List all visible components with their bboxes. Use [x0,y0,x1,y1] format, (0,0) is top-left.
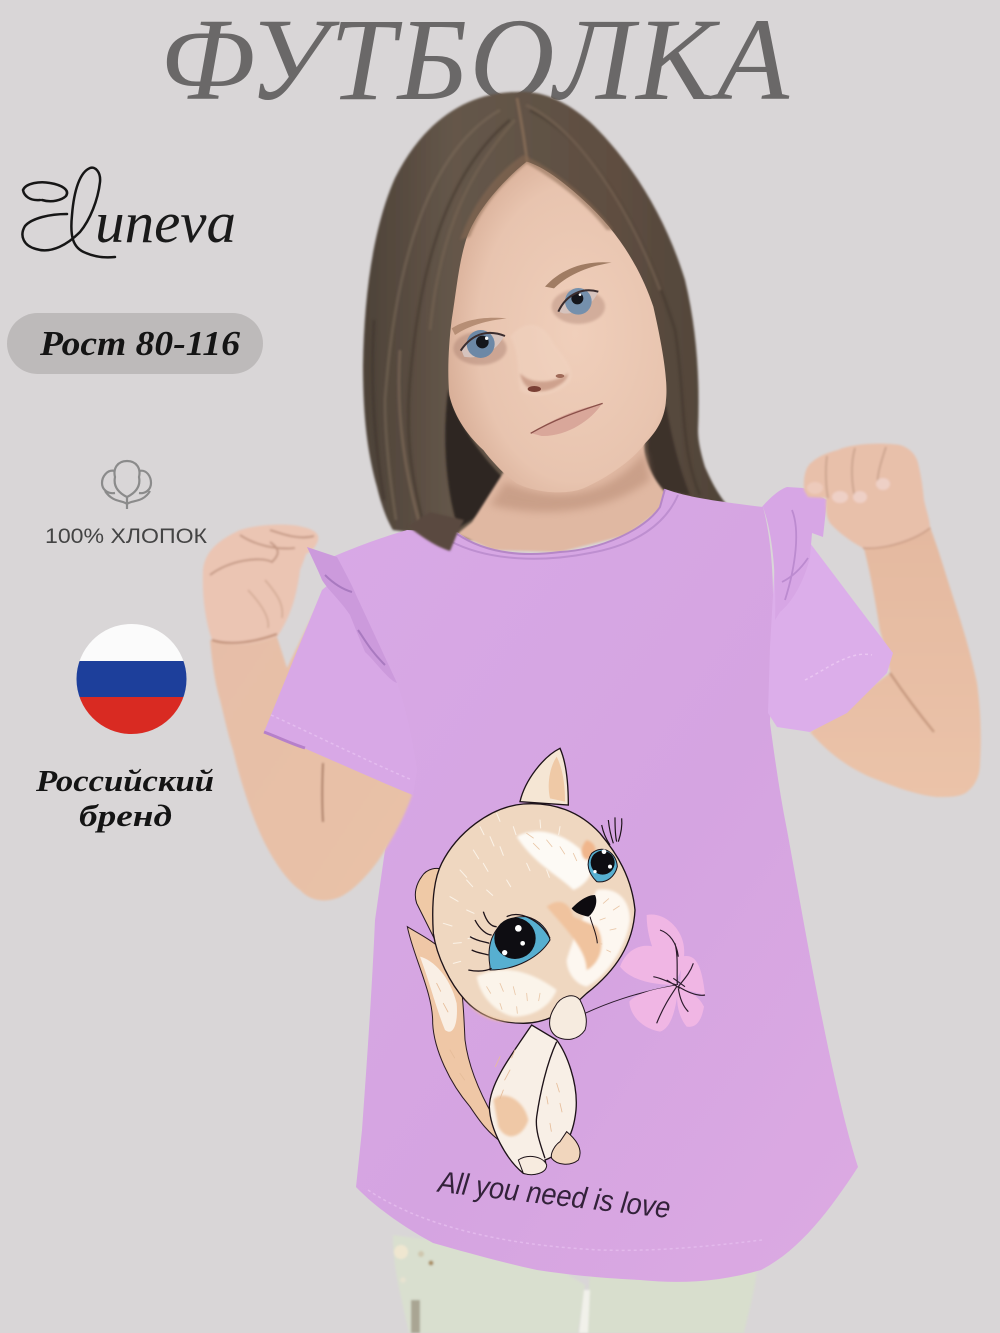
hair lock over the shirt [408,512,464,551]
hem stitching [368,1190,762,1250]
left arm and hand [203,525,412,900]
hair [363,92,727,540]
right eye [558,288,598,315]
left sleeve [264,547,417,795]
fur highlights [517,831,592,890]
fur strokes [443,813,560,963]
face [448,162,666,492]
right arm [810,527,981,797]
brand origin label: Российский [35,763,214,798]
nose and mouth [572,895,596,917]
big eye [468,912,550,971]
height badge: Рост 80-116 [39,324,241,363]
flower stem [585,985,677,1013]
nose [510,325,572,396]
material label: 100% ХЛОПОК [45,525,208,548]
brand logo: Luneva: Luneva [93,190,236,255]
cat print [407,748,705,1225]
hairline shadow [460,155,613,240]
brand logo: Luneva [22,168,236,257]
left eye [461,330,505,358]
brand origin label: бренд [79,798,172,833]
ear [520,748,568,805]
slogan: All you need is love [435,1166,672,1225]
mouth [531,403,603,436]
right ruffle [762,487,827,620]
head [433,804,635,1023]
right hand [804,444,930,548]
collar [450,489,678,559]
icon: cotton boll [102,461,151,509]
left eyebrow [452,318,507,335]
brand origin label [35,763,214,833]
left ruffle [307,547,397,683]
front paw [550,996,586,1039]
icon: Russian flag [76,624,188,735]
back ear [415,868,445,943]
trousers [393,1235,757,1333]
height badge [7,313,263,374]
t-shirt body [330,489,858,1282]
peach patches [547,902,601,970]
right sleeve [762,487,893,732]
photo: girl in t-shirt [203,92,981,1333]
tail [407,927,503,1143]
eye socket shadows [453,332,507,365]
right eyebrow [545,262,612,288]
dark hair beside the neck [445,390,510,528]
body [489,1025,576,1174]
flower [620,915,705,1032]
small eye [588,817,622,882]
hair strands [372,98,700,530]
head and face [448,155,666,492]
paws [551,1132,580,1164]
neck [457,440,665,552]
